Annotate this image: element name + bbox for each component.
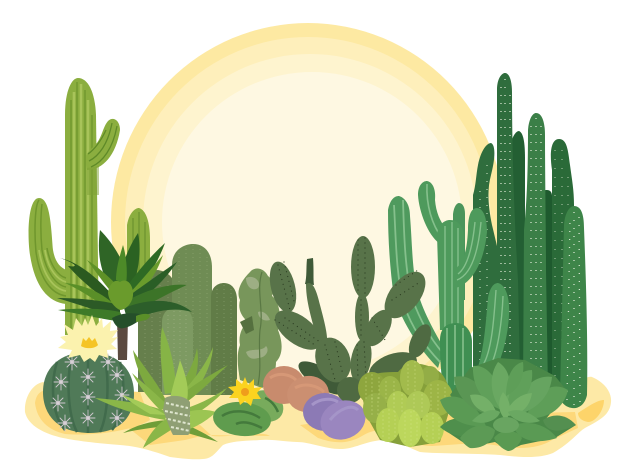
spines <box>54 374 68 390</box>
saguaro cactus <box>29 78 150 335</box>
left arm <box>418 181 446 243</box>
sand shadow left <box>35 390 150 434</box>
low leaves <box>57 298 120 318</box>
right column <box>211 283 237 395</box>
left arm <box>29 198 66 304</box>
leaning column <box>473 143 520 380</box>
echeveria succulent <box>440 358 576 451</box>
pedestal <box>163 396 190 435</box>
back stem <box>453 203 465 300</box>
aloe <box>95 327 228 448</box>
front column <box>162 306 193 395</box>
sand shadow under aloe and lithops <box>125 425 270 445</box>
front column <box>475 283 509 380</box>
tall column <box>172 244 212 395</box>
back column <box>510 131 525 385</box>
mid column <box>523 113 548 390</box>
center bulb <box>108 280 133 310</box>
candelabra cactus <box>418 181 509 395</box>
lower outer leaves <box>440 418 484 436</box>
barrel flower <box>58 315 118 362</box>
sage columnar cacti <box>138 244 237 395</box>
dark columnar cacti <box>473 73 587 408</box>
trunk <box>437 220 464 330</box>
crested cactus <box>238 269 282 388</box>
small right arm <box>127 208 150 300</box>
right arm <box>86 119 120 170</box>
green lithops with yellow flower <box>212 377 289 438</box>
yellow-green clustered cactus <box>358 360 453 447</box>
back leaves <box>99 230 130 295</box>
trunk <box>65 78 99 335</box>
middle leaves <box>440 396 486 426</box>
thin green cactus <box>388 196 444 368</box>
right arm <box>454 208 487 288</box>
sun <box>111 23 505 421</box>
barrel cactus <box>43 352 134 433</box>
purple stones <box>303 393 371 446</box>
rosette backing <box>440 358 576 451</box>
inner leaves <box>470 394 497 414</box>
back left column <box>138 270 176 392</box>
front column <box>560 206 587 408</box>
lower segment <box>440 323 472 395</box>
brown stones <box>263 366 331 415</box>
agave <box>57 230 192 360</box>
yellow flower <box>228 377 262 406</box>
spine dots <box>275 238 420 380</box>
right dark column <box>551 139 574 395</box>
sand shadow under right plants <box>300 412 578 448</box>
left leaves <box>60 258 118 308</box>
opuntia prickly pear <box>265 236 436 403</box>
narrow back column <box>540 190 552 395</box>
trunk <box>117 318 128 360</box>
tallest column <box>497 73 520 375</box>
sand ground <box>25 377 611 459</box>
